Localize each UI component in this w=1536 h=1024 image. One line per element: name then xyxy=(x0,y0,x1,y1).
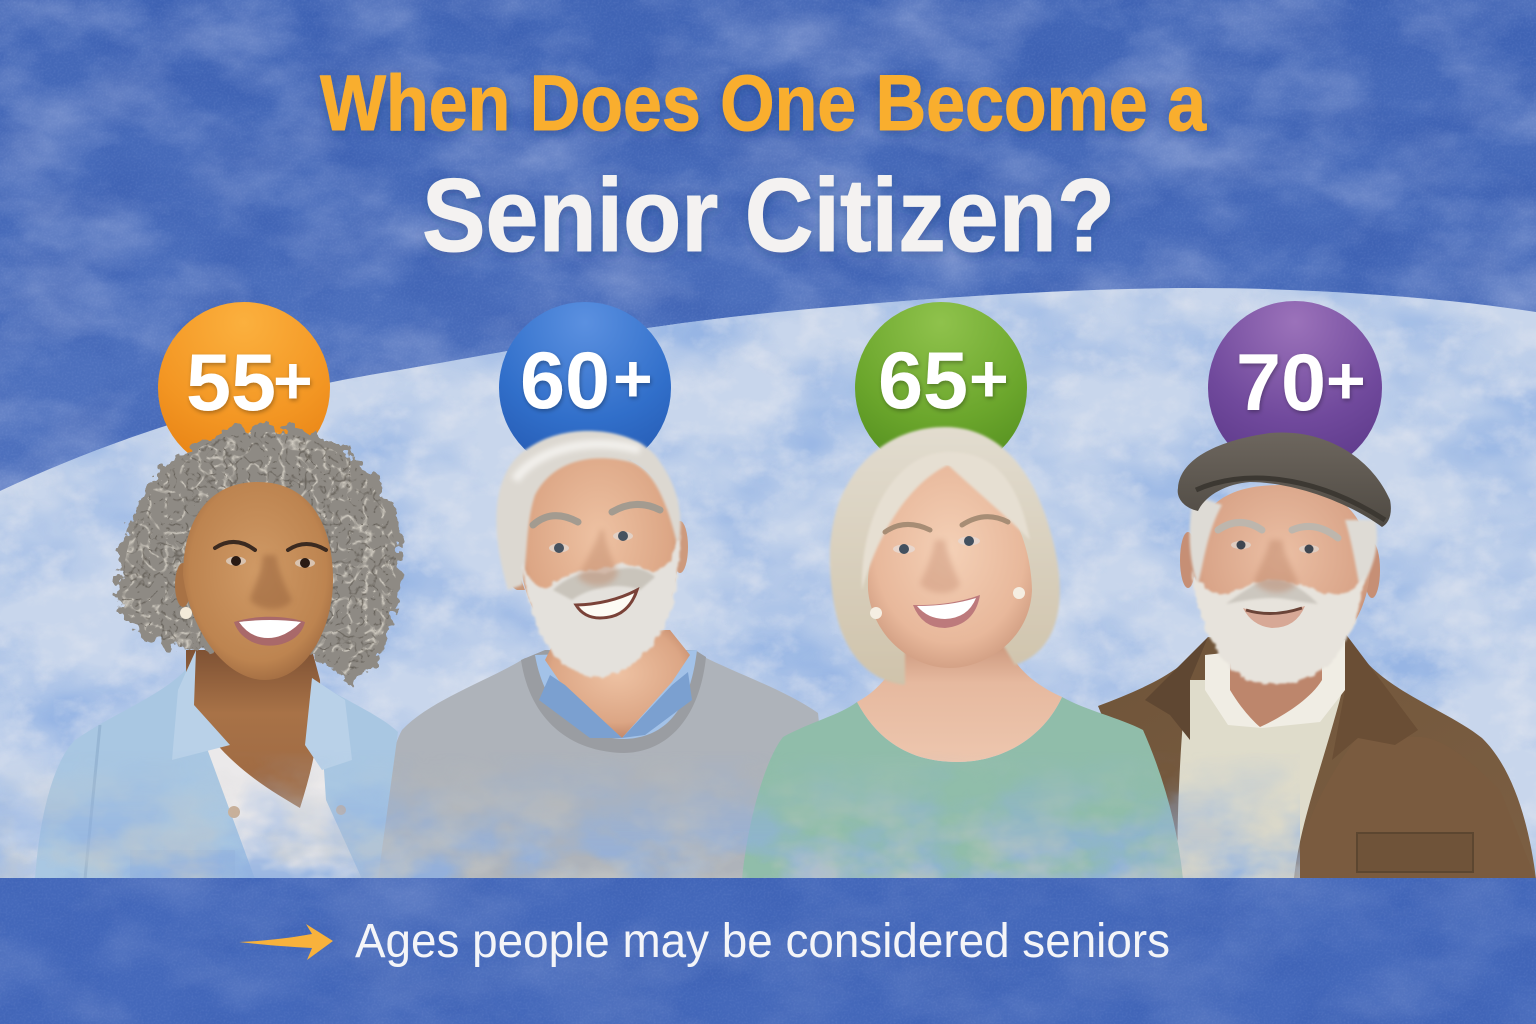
background: light wave panel xyxy=(0,280,1536,880)
age badge 70+: 70 xyxy=(1236,338,1326,428)
age badge 55+: 55 xyxy=(186,338,276,428)
mottled fade over the lower part of the people xyxy=(0,750,1300,879)
age badge 55+ xyxy=(158,302,330,474)
legend caption: Ages people may be considered seniors xyxy=(355,915,1170,968)
person: man with flat cap and brown jacket xyxy=(1098,432,1536,879)
age badge 70+ xyxy=(1208,301,1382,475)
age badge 60+: + xyxy=(613,341,653,417)
person: man in grey sweater xyxy=(378,431,835,879)
age badge 60+: 60 xyxy=(520,336,610,426)
person: woman with blonde-white hair and green top xyxy=(742,427,1183,879)
age badge 65+ xyxy=(855,302,1027,474)
title: line 2: Senior Citizen? xyxy=(422,158,1115,274)
age badge 65+: 65 xyxy=(878,336,968,426)
age badge 55+: + xyxy=(273,343,313,419)
person: woman with curly grey hair and denim jacket xyxy=(35,425,402,879)
age badge 70+: + xyxy=(1326,343,1366,419)
age badge 60+ xyxy=(499,302,671,474)
bottom band xyxy=(0,878,1536,1024)
title: line 1: When Does One Become a xyxy=(320,58,1207,147)
legend arrow icon xyxy=(239,924,333,960)
age badge 65+: + xyxy=(969,341,1009,417)
